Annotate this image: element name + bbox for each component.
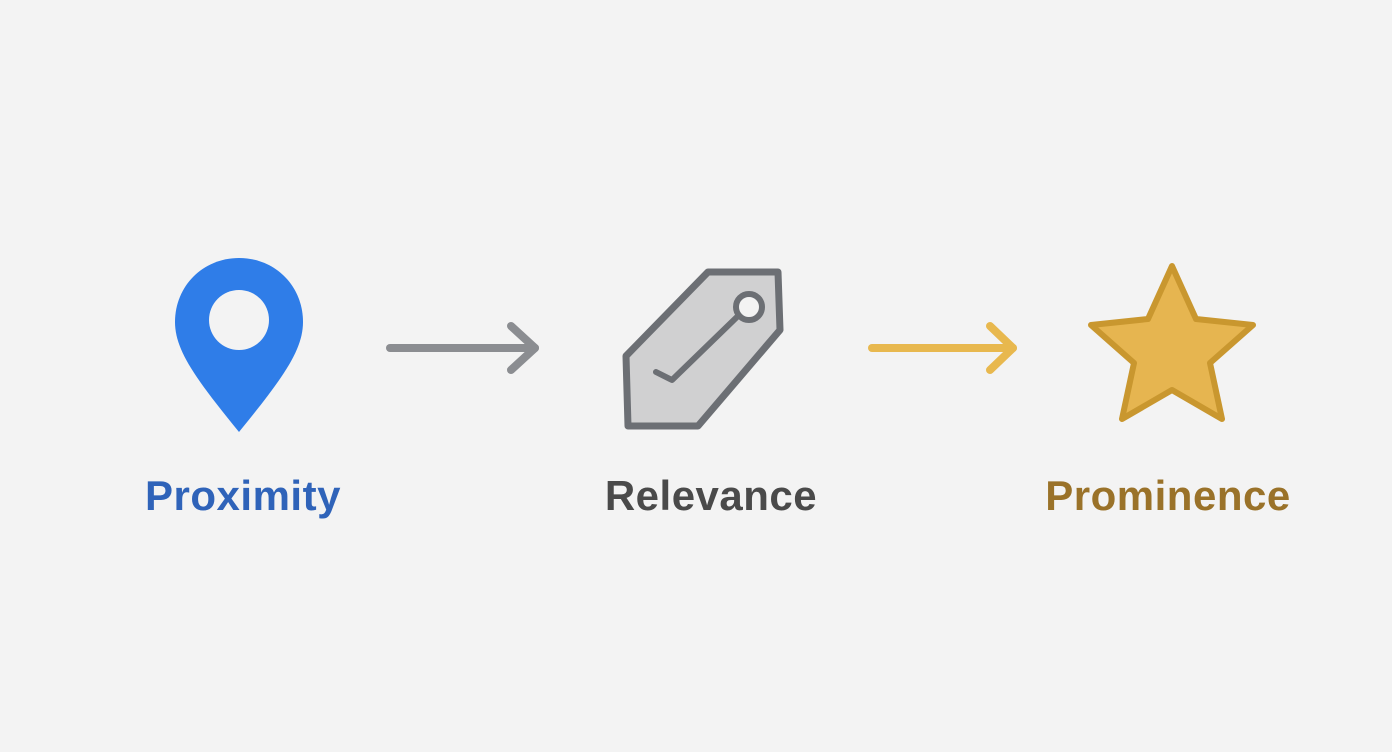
label: Proximity: Proximity [145,472,341,519]
arrow: proximity to relevance [390,326,535,370]
arrow: relevance to prominence [872,326,1013,370]
label: Prominence: Prominence [1045,472,1291,519]
icon: location pin [175,258,303,432]
icon: star [1091,266,1253,419]
label: Relevance: Relevance [605,472,817,519]
icon: tag with check [626,272,780,426]
